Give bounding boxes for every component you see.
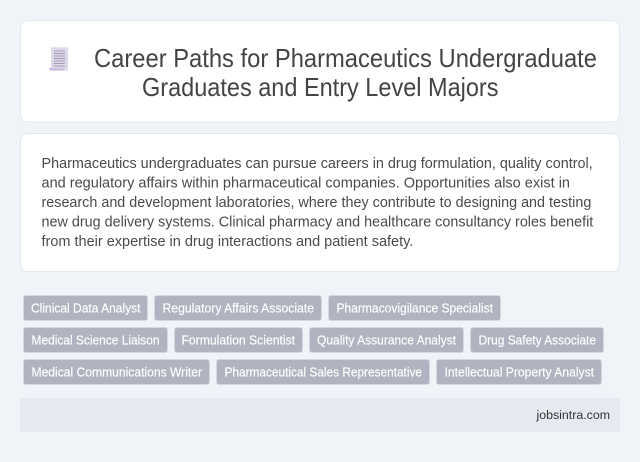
tag: Pharmacovigilance Specialist: [328, 296, 500, 320]
tag: Pharmacovigilance Specialist: Pharmacovigilance Specialist: [336, 302, 493, 316]
title: Graduates and Entry Level Majors: [142, 74, 498, 102]
tag: Clinical Data Analyst: [24, 296, 148, 320]
tag: Regulatory Affairs Associate: Regulatory Affairs Associate: [162, 302, 314, 316]
footer source: jobsintra.com: [536, 408, 610, 422]
tag: Regulatory Affairs Associate: [154, 296, 322, 320]
tag: Formulation Scientist: Formulation Scientist: [182, 334, 295, 348]
tag: Medical Science Liaison: [24, 328, 168, 352]
tag: Clinical Data Analyst: Clinical Data Analyst: [31, 302, 141, 316]
tag: Medical Communications Writer: [24, 360, 210, 384]
tag: Formulation Scientist: [174, 328, 302, 352]
tag: Medical Communications Writer: Medical Communications Writer: [32, 366, 202, 380]
tag: Drug Safety Associate: Drug Safety Associate: [478, 334, 596, 348]
text block: description: and regulatory affairs within pharmaceutical companies. Opportunities also exist in: [42, 176, 570, 192]
icon: document scroll: [49, 47, 68, 71]
text block: description: Pharmaceutics undergraduates can pursue careers in drug formulation, quality control,: [42, 156, 593, 172]
tag: Drug Safety Associate: [470, 328, 604, 352]
tag: Pharmaceutical Sales Representative: Pharmaceutical Sales Representative: [224, 366, 422, 380]
panel: description: [20, 134, 620, 272]
tags: career paths: [24, 296, 604, 384]
tag: Intellectual Property Analyst: [436, 360, 602, 384]
title: Career Paths for Pharmaceutics Undergraduate: [94, 45, 597, 73]
tag: Quality Assurance Analyst: [310, 328, 464, 352]
tag: Medical Science Liaison: Medical Science Liaison: [32, 334, 160, 348]
title: [94, 45, 597, 102]
footer: [20, 398, 620, 432]
text block: description: [42, 156, 593, 250]
tag: Pharmaceutical Sales Representative: [216, 360, 430, 384]
tag: Quality Assurance Analyst: Quality Assurance Analyst: [317, 334, 456, 348]
panel: header: [20, 20, 620, 122]
text block: description: from their expertise in drug interactions and patient safety.: [42, 234, 413, 250]
text block: description: research and development laboratories, where they contribute to designing and testing: [42, 195, 591, 211]
text block: description: new drug delivery systems. Clinical pharmacy and healthcare consultancy roles benefit: [42, 214, 593, 230]
tag: Intellectual Property Analyst: Intellectual Property Analyst: [444, 366, 594, 380]
